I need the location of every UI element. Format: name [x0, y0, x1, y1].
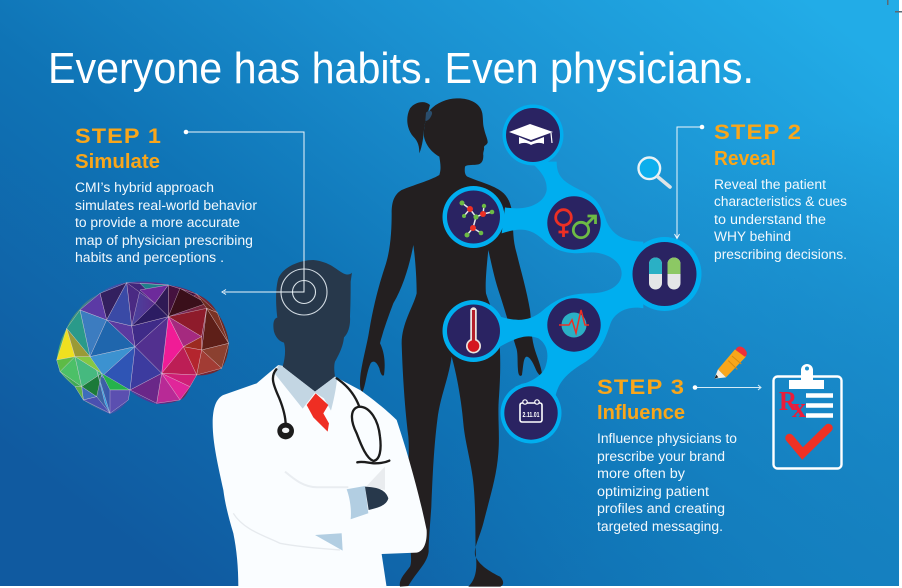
network of cyan circles	[442, 104, 702, 444]
stethoscope	[273, 369, 389, 463]
icon: magnifying glass	[638, 158, 670, 187]
crop marks	[887, 0, 902, 12]
step 2 text: characteristics & cues	[714, 194, 847, 209]
icon: prescription clipboard	[774, 364, 842, 468]
collar	[275, 365, 337, 411]
step 2 callout line	[674, 125, 704, 238]
step 3 text: prescribe your brand	[597, 449, 725, 464]
node: gender symbols	[547, 196, 601, 250]
connector shape	[500, 162, 643, 400]
node: calendar	[500, 382, 562, 444]
ponytail	[407, 102, 430, 153]
node: graduation cap	[502, 104, 564, 166]
step 3 text: optimizing patient	[597, 484, 709, 499]
step 3 text: more often by	[597, 466, 685, 481]
step 2 text: to understand the	[714, 212, 826, 227]
step 1 text	[75, 125, 258, 265]
step 2 text: Reveal	[714, 148, 776, 170]
step 1 text: STEP 1	[75, 125, 162, 148]
step 1 callout lines and target	[184, 130, 327, 315]
step 2 text: STEP 2	[714, 121, 802, 144]
woman silhouette	[360, 98, 542, 587]
step 3 text: profiles and creating	[597, 501, 725, 516]
step 1 text: CMI’s hybrid approach	[75, 180, 214, 195]
node: pills	[628, 237, 702, 311]
icon: prescription clipboard: x	[792, 392, 806, 424]
icon: prescription clipboard: R	[779, 386, 797, 416]
step 1 text: to provide a more accurate	[75, 215, 240, 230]
node: heartbeat	[547, 298, 601, 352]
step 3 text: targeted messaging.	[597, 519, 723, 534]
head	[273, 260, 352, 392]
step 2 text	[714, 121, 847, 262]
step 1 text: simulates real-world behavior	[75, 198, 258, 213]
step 2 text: Reveal the patient	[714, 177, 826, 192]
step 1 text: Simulate	[75, 151, 160, 173]
step 3 text	[597, 376, 737, 534]
step 2 text: prescribing decisions.	[714, 247, 847, 262]
coat	[213, 365, 427, 587]
node: molecule	[442, 186, 504, 248]
step 3 text: Influence physicians to	[597, 431, 737, 446]
node: calendar: 2.11.01	[522, 412, 540, 419]
step 3 callout line	[693, 385, 761, 390]
step 3 text: STEP 3	[597, 376, 685, 399]
step 1 text: habits and perceptions .	[75, 250, 224, 265]
brain	[57, 282, 229, 414]
step 1 text: map of physician prescribing	[75, 233, 253, 248]
cuffs and hand	[347, 486, 368, 519]
tie	[307, 393, 329, 432]
doctor	[213, 260, 427, 587]
title: Everyone has habits. Even physicians.	[48, 44, 754, 93]
step 2 text: WHY behind	[714, 229, 791, 244]
step 3 text: Influence	[597, 402, 685, 424]
icon: pencil	[714, 346, 747, 379]
node: thermometer	[442, 300, 504, 362]
